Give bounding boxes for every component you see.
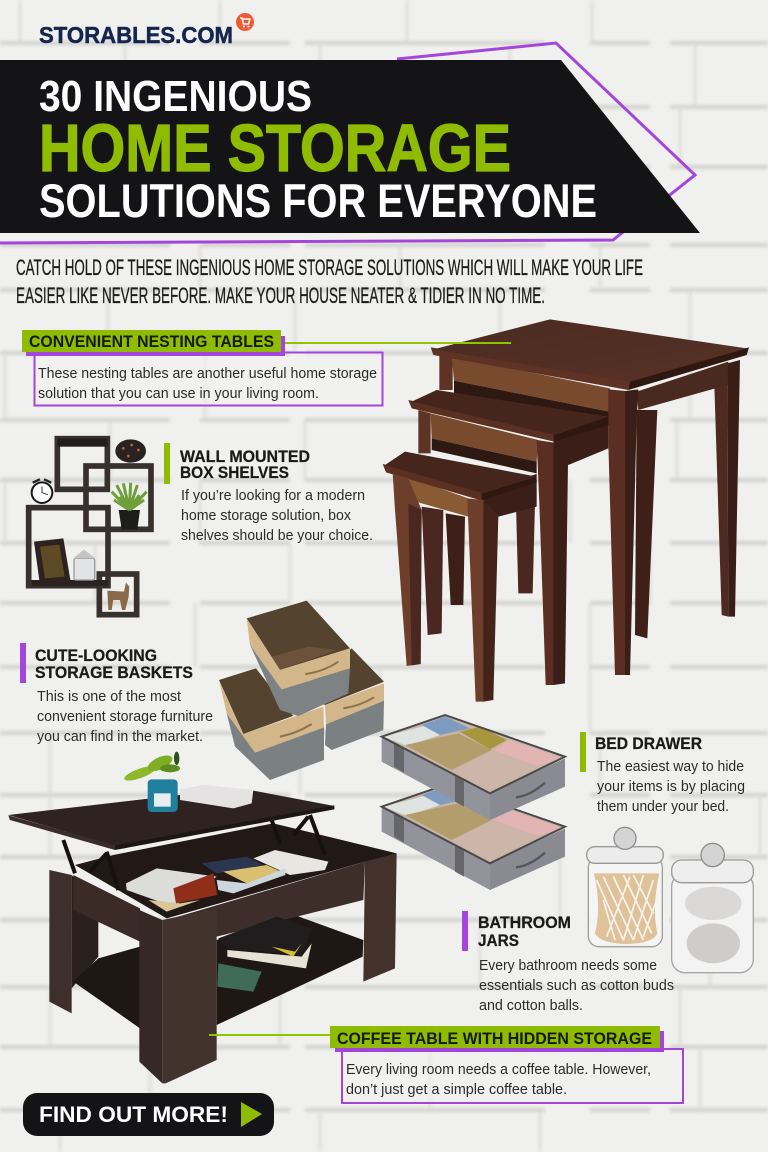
image: bathroom jars [587, 827, 753, 973]
heading: COFFEE TABLE WITH HIDDEN STORAGE [337, 1029, 652, 1048]
section: bathroom jars [462, 911, 674, 1014]
title line 2: HOME STORAGE [39, 111, 511, 186]
vase with plant [123, 752, 180, 812]
middle table [418, 410, 431, 453]
body text [37, 688, 213, 745]
logo: storables.com: STORABLES.COM [39, 22, 233, 48]
heading: BATHROOM [478, 913, 571, 932]
image: storage baskets [219, 601, 384, 780]
small table [422, 507, 443, 635]
body text: Every bathroom needs some [479, 957, 657, 974]
section: bed drawer [580, 732, 745, 815]
title line 3: SOLUTIONS FOR EVERYONE [39, 174, 597, 227]
body text: The easiest way to hide [597, 758, 744, 775]
heading: CONVENIENT NESTING TABLES [29, 332, 274, 351]
leader line: coffee table [209, 1034, 330, 1036]
section: wall mounted box shelves [164, 443, 373, 544]
heading: JARS [478, 931, 519, 950]
body text: you can find in the market. [37, 728, 203, 745]
heading [180, 447, 310, 482]
heading [35, 646, 193, 682]
button: find out more: FIND OUT MORE! [39, 1102, 228, 1127]
body text: home storage solution, box [181, 507, 351, 524]
icon: potted plant [112, 483, 147, 529]
logo: storables.com [39, 13, 254, 48]
image: nesting tables [383, 319, 749, 702]
icon: horse figure [107, 583, 129, 610]
body text [346, 1061, 651, 1098]
lifted lid [8, 790, 334, 846]
heading: WALL MOUNTED [180, 447, 310, 466]
icon: lantern [73, 549, 95, 580]
icon: shopping cart badge [236, 13, 254, 31]
section: cute-looking storage baskets [20, 643, 213, 745]
body text: and cotton balls. [479, 997, 583, 1014]
intro text [16, 255, 643, 308]
jar with cotton buds [587, 827, 663, 947]
icon: play arrow [241, 1102, 262, 1127]
books on lid [180, 785, 253, 808]
title banner [0, 43, 700, 243]
body text: Every living room needs a coffee table. However, [346, 1061, 651, 1078]
icon: picture frame [34, 538, 71, 585]
section: convenient nesting tables [22, 330, 382, 406]
body text: If you’re looking for a modern [181, 487, 365, 504]
section: coffee table with hidden storage [330, 1026, 683, 1103]
body text: don’t just get a simple coffee table. [346, 1081, 567, 1098]
body text: your items is by placing [597, 778, 745, 795]
heading: BOX SHELVES [180, 463, 289, 482]
body text [38, 365, 377, 402]
body text: essentials such as cotton buds [479, 977, 674, 994]
books on the lower shelf [217, 917, 312, 992]
leader line: nesting tables [285, 342, 511, 344]
heading [478, 913, 571, 950]
body text: solution that you can use in your living room. [38, 385, 319, 402]
body text: These nesting tables are another useful home storage [38, 365, 377, 382]
books in the hidden compartment [126, 850, 328, 912]
heading: BED DRAWER [595, 734, 702, 753]
image: lift-top coffee table [8, 752, 397, 1083]
body text [597, 758, 745, 815]
body text: convenient storage furniture [37, 708, 213, 725]
title line 1: 30 INGENIOUS [39, 72, 312, 121]
body text: This is one of the most [37, 688, 182, 705]
jar with cotton balls [672, 843, 753, 973]
body text [479, 957, 674, 1014]
body text [181, 487, 373, 544]
icon: alarm clock [32, 479, 52, 503]
heading: CUTE-LOOKING [35, 646, 157, 665]
big table back legs [635, 410, 657, 638]
image: under-bed storage drawers [382, 715, 565, 890]
body text: shelves should be your choice. [181, 527, 373, 544]
body text: them under your bed. [597, 798, 729, 815]
lift mechanism [63, 815, 325, 890]
icon: candle pot [115, 439, 146, 463]
button: find out more [23, 1093, 274, 1136]
image: wall box shelves [29, 439, 151, 615]
heading: STORAGE BASKETS [35, 663, 193, 682]
